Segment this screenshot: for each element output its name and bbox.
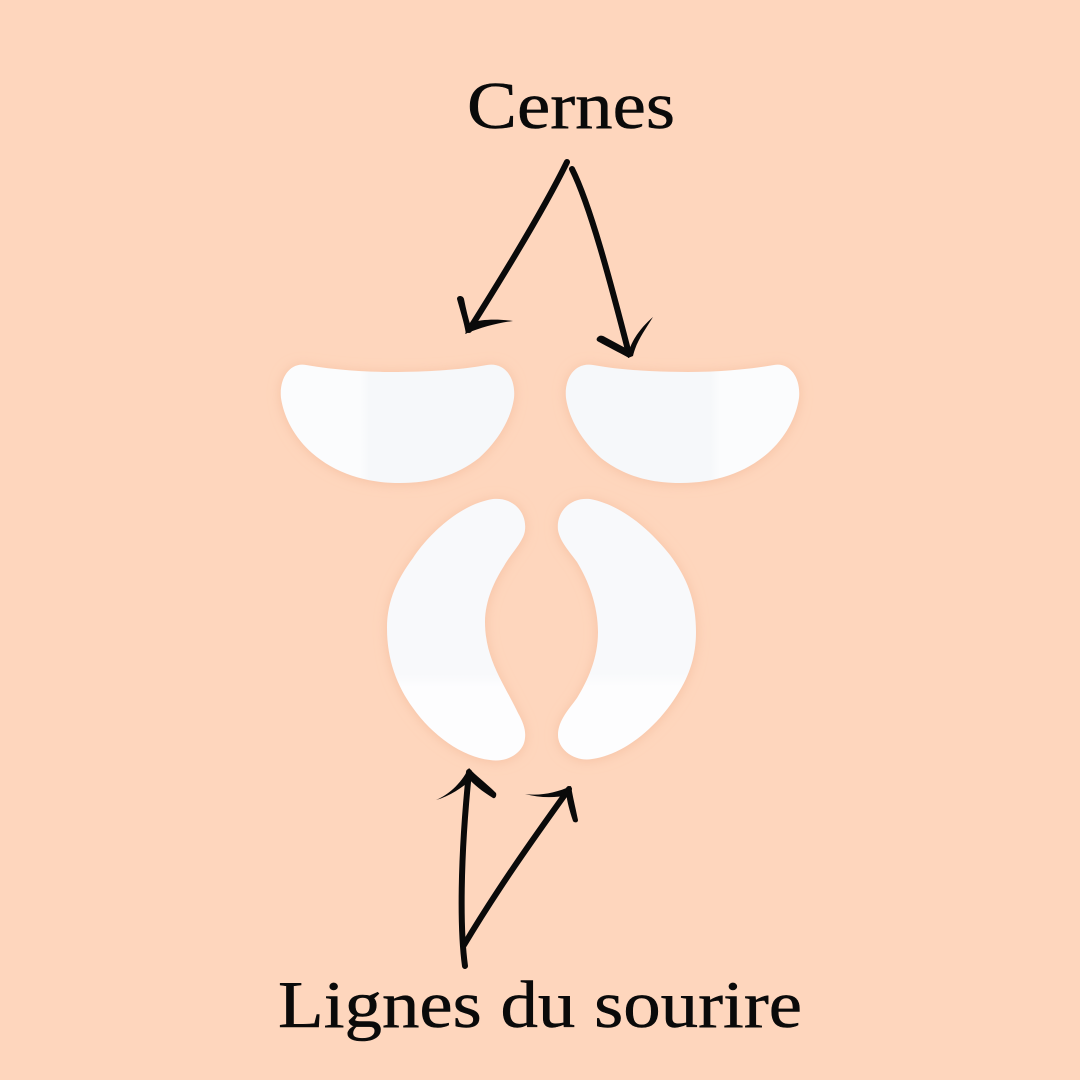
label: Lignes du sourire: Lignes du sourire bbox=[278, 968, 802, 1042]
arrow: Cernes to left patch bbox=[457, 162, 567, 334]
arrow: Cernes to right patch bbox=[572, 169, 653, 358]
title: Cernes: Cernes bbox=[467, 69, 675, 143]
arrow: label to lower right patch bbox=[464, 786, 578, 945]
patch: top right under-eye bbox=[566, 365, 799, 483]
arrow: label to lower left patch bbox=[436, 768, 496, 966]
patch: lower right smile line bbox=[558, 499, 696, 759]
patch: lower left smile line bbox=[387, 499, 525, 760]
patch: top left under-eye bbox=[281, 365, 514, 483]
